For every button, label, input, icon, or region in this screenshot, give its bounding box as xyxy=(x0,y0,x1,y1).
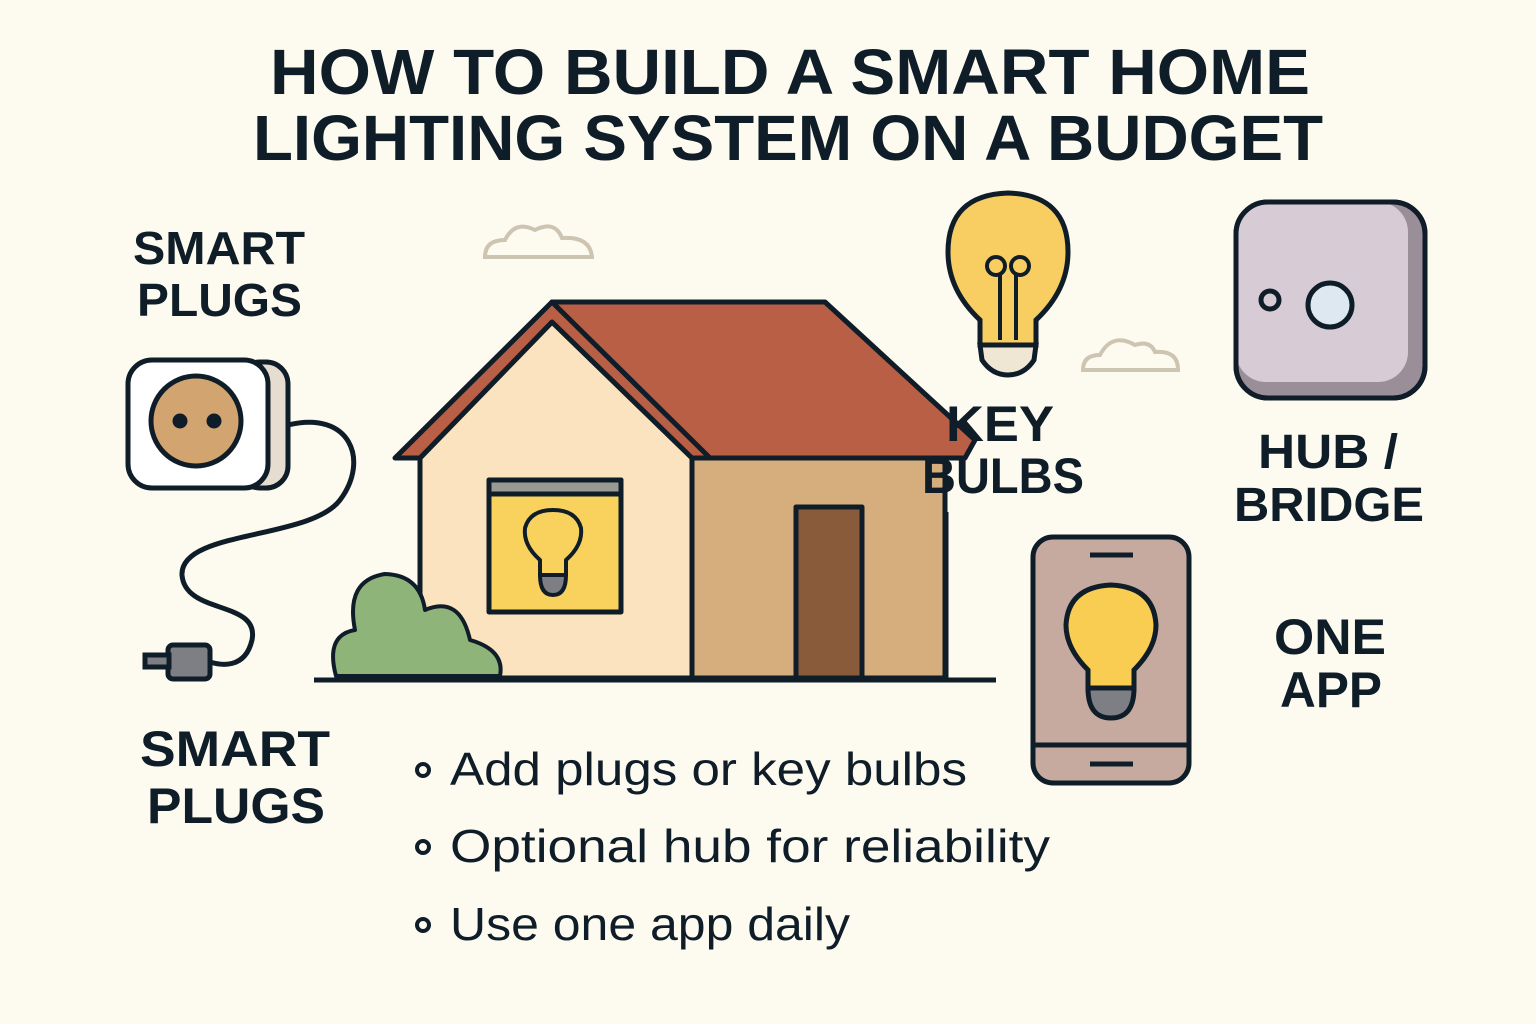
bullet list: Optional hub for reliability xyxy=(450,820,1050,872)
label: smart plugs top: PLUGS xyxy=(137,274,302,326)
label: one app xyxy=(1274,609,1386,718)
bullet list: Use one app daily xyxy=(450,898,850,950)
label: smart plugs bottom: SMART xyxy=(140,721,330,777)
title xyxy=(253,36,1323,174)
label: key bulbs: BULBS xyxy=(922,448,1084,504)
label: hub / bridge xyxy=(1234,426,1424,532)
title: HOW TO BUILD A SMART HOME xyxy=(270,36,1310,108)
icon: smart plug with cord xyxy=(128,360,354,679)
house xyxy=(314,302,996,680)
label: smart plugs bottom xyxy=(140,721,330,834)
label: hub / bridge: BRIDGE xyxy=(1234,479,1424,532)
label: key bulbs: KEY xyxy=(946,396,1054,452)
icon: hub xyxy=(1236,202,1425,398)
cloud left xyxy=(485,226,592,257)
bullet list xyxy=(417,743,1050,950)
cloud right xyxy=(1083,340,1178,370)
label: smart plugs top xyxy=(133,222,305,326)
label: hub / bridge: HUB / xyxy=(1258,426,1398,479)
label: smart plugs top: SMART xyxy=(133,222,305,274)
icon: phone xyxy=(1033,537,1189,783)
title: LIGHTING SYSTEM ON A BUDGET xyxy=(253,102,1323,174)
icon: light bulb xyxy=(948,193,1068,375)
label: key bulbs xyxy=(922,396,1084,504)
label: smart plugs bottom: PLUGS xyxy=(147,778,325,834)
bullet list: Add plugs or key bulbs xyxy=(450,743,967,795)
label: one app: ONE xyxy=(1274,609,1386,665)
label: one app: APP xyxy=(1280,662,1382,718)
